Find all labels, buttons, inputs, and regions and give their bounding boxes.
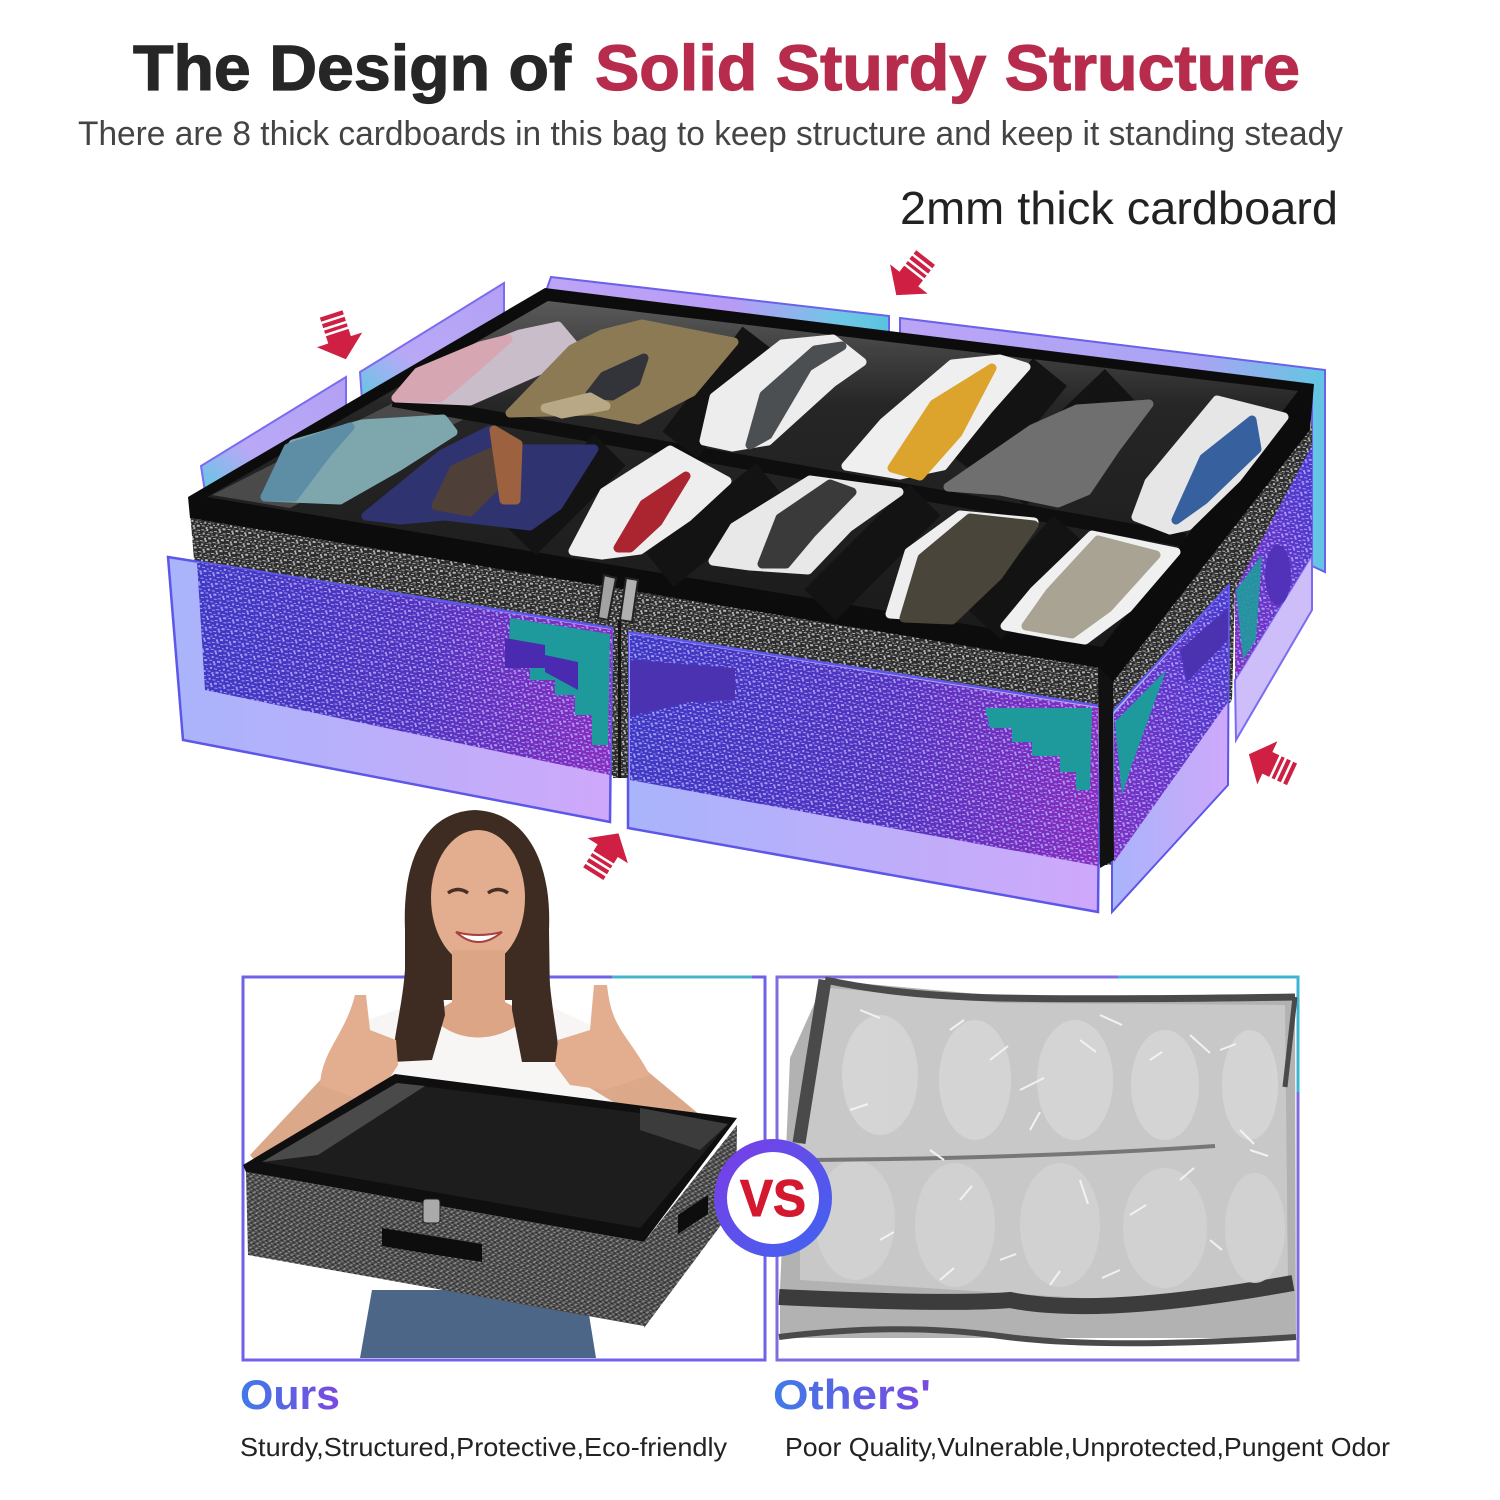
shoe: blue sneaker [1136, 400, 1284, 530]
small bag zipper [423, 1199, 440, 1223]
small bag front [246, 1172, 644, 1326]
shoe: teal sandal [265, 419, 453, 500]
caption: ours: Sturdy,Structured,Protective,Eco-friendly [240, 1432, 727, 1462]
subtitle: There are 8 thick cardboards in this bag to keep structure and keep it standing steady [78, 115, 1343, 153]
arrow: top right [878, 243, 944, 310]
left zipper [799, 980, 825, 1143]
callout: 2mm thick cardboard: 2mm thick cardboard [900, 182, 1338, 234]
lid frame [188, 288, 1314, 682]
right arm [585, 1065, 712, 1125]
bag window [800, 988, 1288, 1300]
zipper pulls [598, 575, 638, 622]
eyes [448, 890, 508, 893]
bag corner edge [1098, 664, 1114, 868]
neck [430, 950, 530, 1038]
centre seam [815, 1146, 1215, 1160]
storage bag body [190, 425, 1312, 865]
label: ours: Ours [240, 1371, 340, 1418]
sleeves bottom [815, 1160, 1285, 1288]
shoe: red sneaker [573, 450, 727, 555]
cardboard panel: front left [168, 557, 612, 822]
shoe: beige sneaker [1005, 535, 1176, 640]
lid window [207, 301, 1298, 647]
arrow: bottom [573, 821, 639, 886]
panel: others [777, 977, 1298, 1360]
shoe: olive [510, 324, 734, 420]
hair lock left [392, 940, 445, 1062]
dark compartments [520, 340, 1120, 625]
VS badge: VS [740, 1170, 806, 1228]
transparent lid with shoes [188, 288, 1314, 682]
shoe: white sneaker [704, 339, 862, 447]
arrow: right [1239, 733, 1302, 796]
plastic bag [779, 980, 1296, 1343]
caption: others: Poor Quality,Vulnerable,Unprotected,Pungent Odor [785, 1432, 1390, 1462]
sleeves top [842, 1015, 1278, 1140]
left arm [250, 1075, 362, 1170]
panel: ours [243, 810, 765, 1360]
title: Solid Sturdy Structure [595, 32, 1300, 104]
shoe: grey slip-on [948, 404, 1149, 503]
hair lock right [512, 935, 560, 1062]
title: The Design of [133, 32, 572, 104]
top zipper [825, 980, 1295, 999]
bottom edge [779, 1329, 1296, 1343]
woman [250, 810, 712, 1358]
face [431, 830, 525, 966]
plastic wrinkles [850, 1010, 1268, 1285]
title [133, 32, 1300, 104]
small bag handle [382, 1228, 482, 1262]
VS badge [714, 1139, 832, 1257]
others top accent [1118, 977, 1298, 1092]
small bag side [644, 1125, 737, 1328]
arrow: top left [309, 307, 369, 367]
lower right cardboard panel [1235, 445, 1312, 740]
right thumb [555, 985, 650, 1090]
small bag side handle [678, 1195, 708, 1234]
cardboard panel: right side [1112, 585, 1229, 912]
others frame [777, 977, 1298, 1360]
hair [405, 810, 550, 1000]
centre divider [393, 400, 1185, 540]
ours frame [243, 977, 765, 1360]
jeans [360, 1290, 596, 1358]
label: others: Others' [773, 1371, 931, 1418]
shoe: yellow sneaker [846, 359, 1026, 476]
cardboard panel: front right [628, 632, 1100, 912]
left thumb [320, 995, 398, 1098]
shoe: navy flat [366, 430, 594, 526]
smile [456, 932, 502, 942]
bag fill [780, 980, 1296, 1338]
storage bag zip column [613, 600, 628, 778]
bottom zipper [779, 1283, 1293, 1306]
back and side cardboard panels [201, 277, 1325, 572]
shoe: brown sneaker [890, 515, 1034, 620]
grey left corner [212, 402, 470, 508]
shoe: pink [396, 326, 574, 401]
small bag lid [243, 1074, 737, 1242]
shirt [300, 1005, 640, 1140]
shoe: black sneaker [713, 480, 899, 570]
right zipper [1285, 997, 1295, 1087]
small bag [243, 1074, 737, 1328]
